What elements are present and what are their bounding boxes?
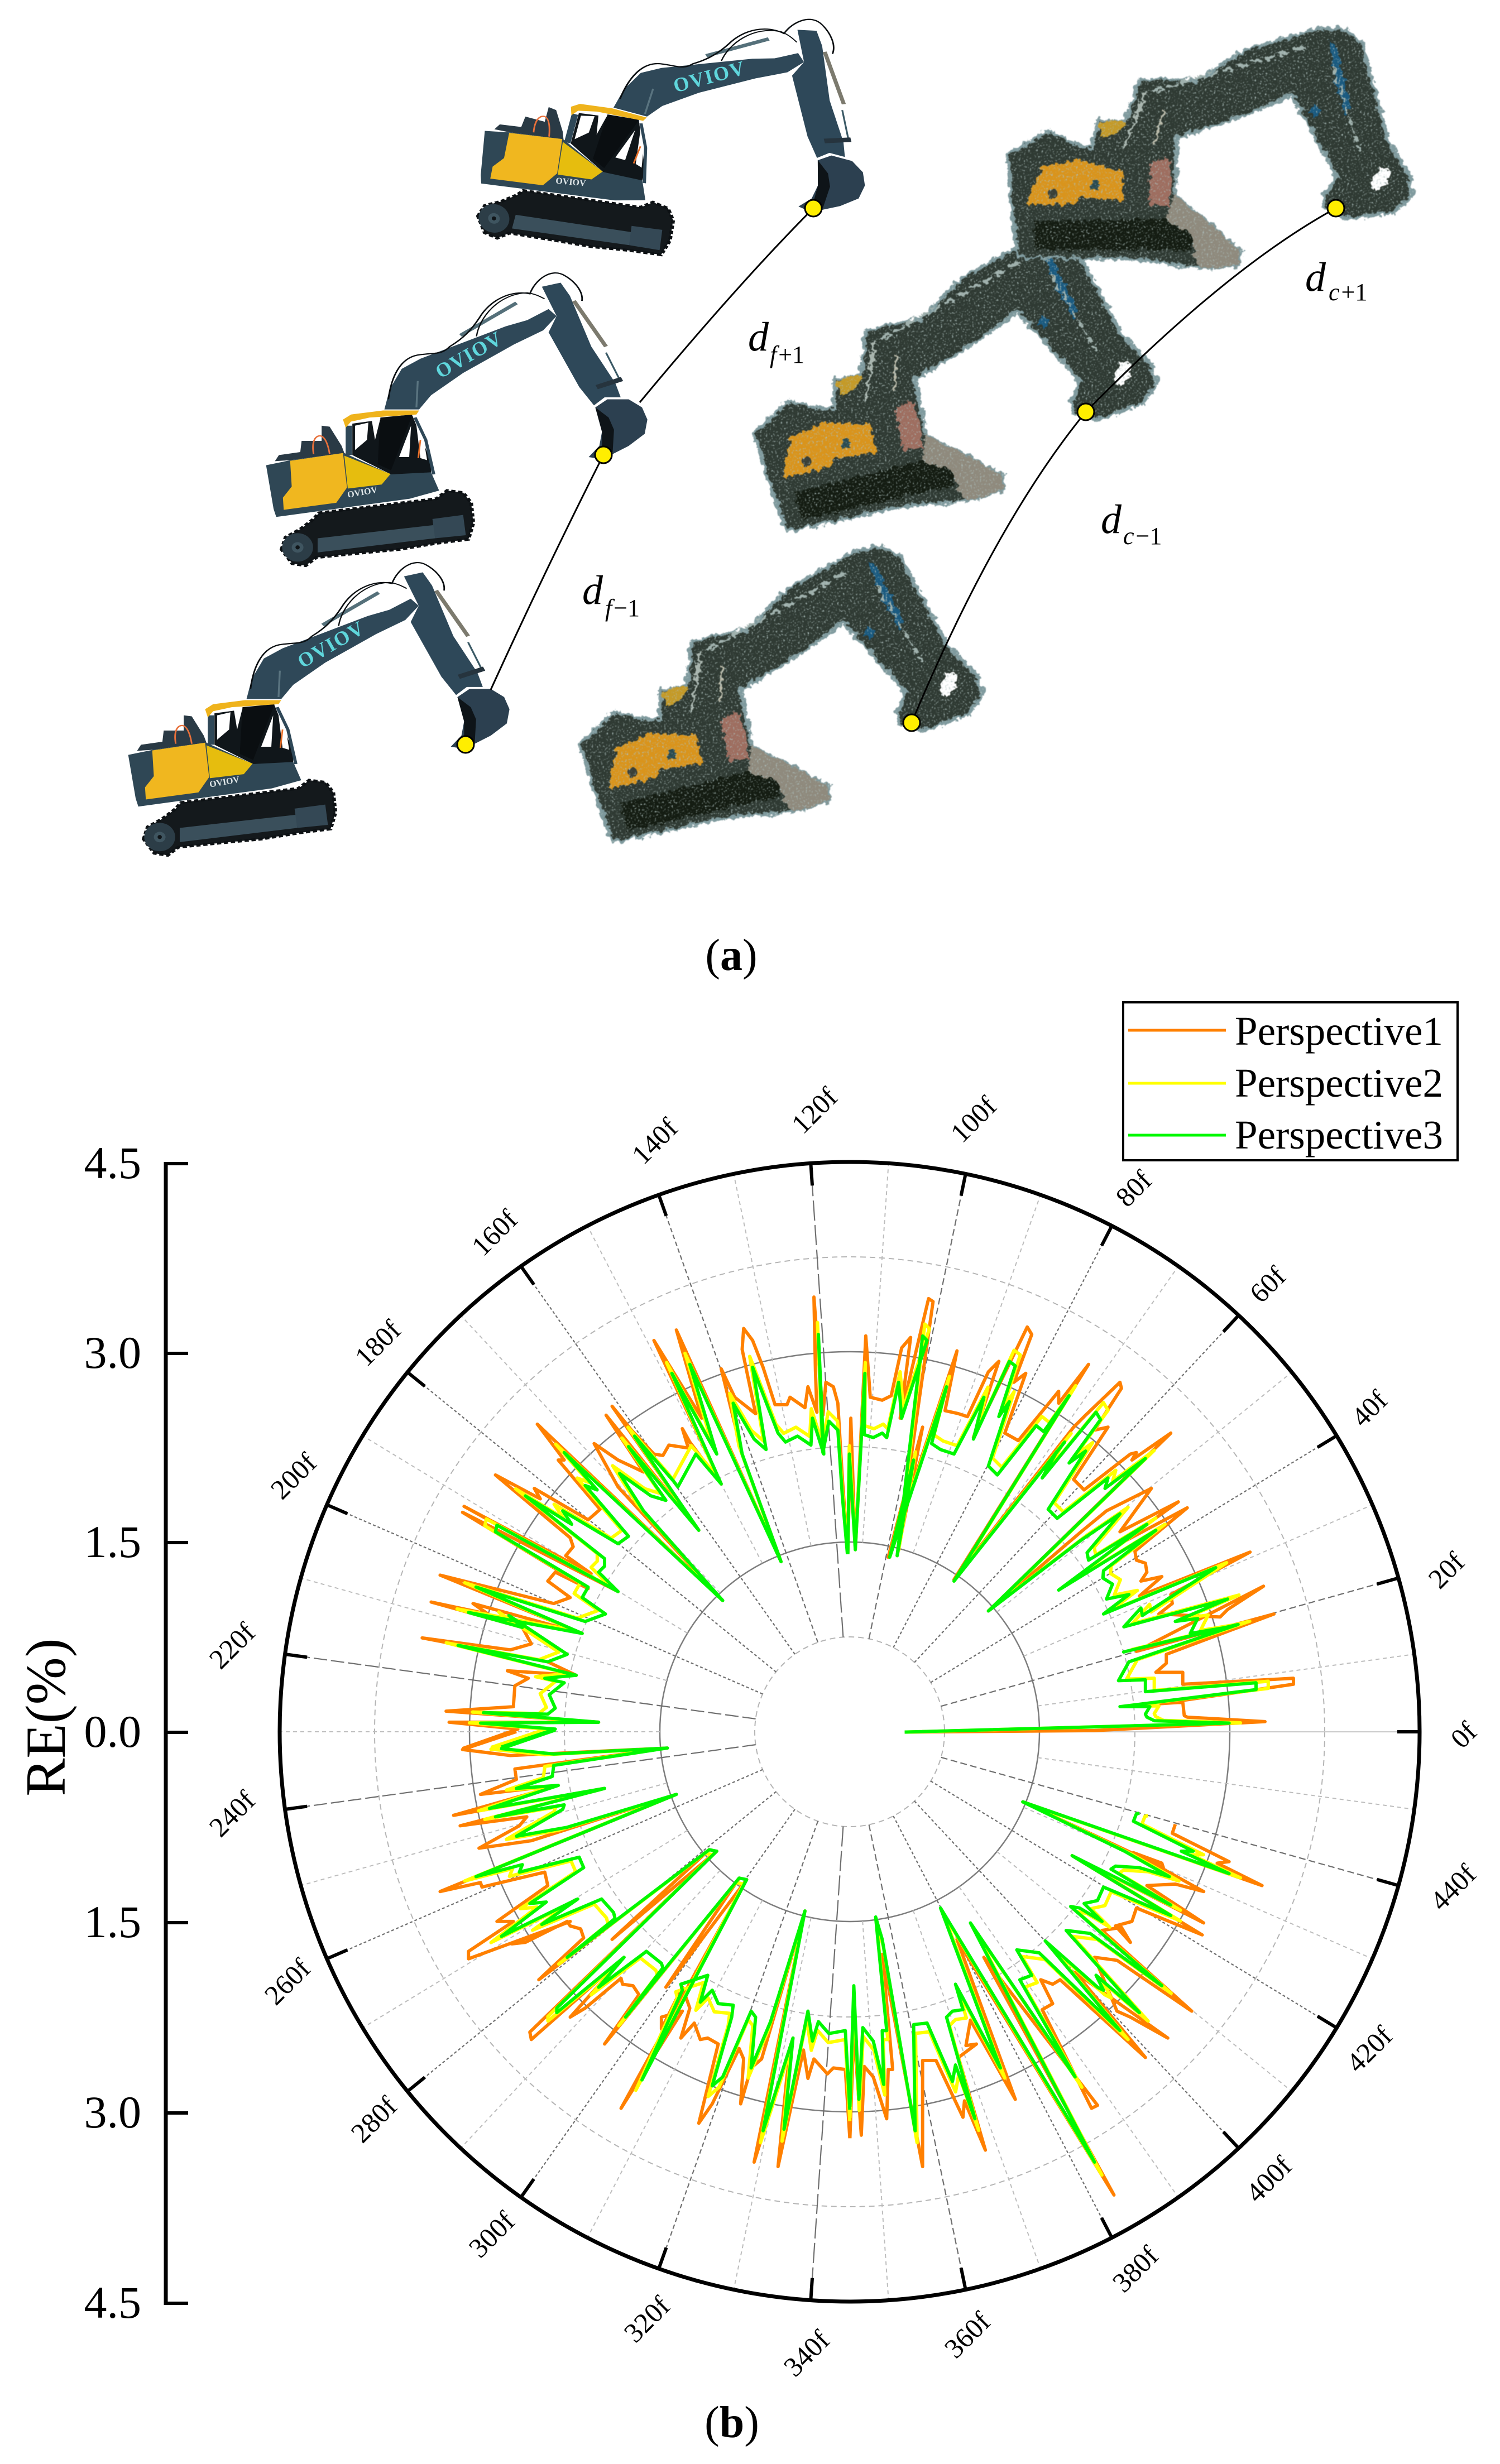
- label d c+1: d: [1305, 254, 1326, 300]
- excavator photo frame lower: [128, 563, 510, 856]
- polar chart outer circle: [280, 1162, 1420, 2302]
- caption a: (a): [705, 931, 758, 980]
- RE axis tick labels: [84, 1137, 141, 2328]
- RE axis line and ticks: [166, 1162, 188, 2305]
- polar frame labels: 320f: [617, 2290, 676, 2348]
- polar frame labels: 180f: [348, 1314, 407, 1372]
- label d f+1: +1: [778, 341, 804, 368]
- polar frame labels: [203, 1081, 1483, 2383]
- excavator photo frame middle: [266, 273, 648, 566]
- polar frame labels: 360f: [938, 2306, 996, 2364]
- polar tick marks: [285, 1163, 1420, 2300]
- label d c+1: c: [1329, 278, 1340, 306]
- RE axis tick labels: 1.5: [84, 1896, 141, 1947]
- polar frame labels: 380f: [1106, 2240, 1164, 2298]
- label d c+1: +1: [1341, 278, 1367, 306]
- polar frame labels: 200f: [264, 1447, 323, 1505]
- label d c-1: d: [1101, 497, 1122, 542]
- polar frame labels: 440f: [1424, 1858, 1482, 1917]
- label d f-1: −1: [614, 594, 640, 622]
- series: Perspective3 green: [458, 1334, 1256, 2162]
- RE axis title: RE(%): [15, 1638, 78, 1797]
- label d f-1: d: [582, 568, 603, 613]
- polar frame labels: 340f: [777, 2324, 836, 2383]
- polar frame labels: 100f: [944, 1090, 1003, 1149]
- polar frame labels: 420f: [1340, 2020, 1398, 2078]
- label d c-1: −1: [1136, 522, 1162, 550]
- legend: Perspective1: [1235, 1008, 1443, 1054]
- reconstructed excavator upper: [985, 0, 1445, 340]
- series: Perspective1 orange: [422, 1297, 1293, 2195]
- polar frame labels: 240f: [203, 1784, 261, 1843]
- RE axis tick labels: 1.5: [84, 1516, 141, 1567]
- polar frame labels: 260f: [258, 1952, 317, 2011]
- polar frame labels: 220f: [203, 1616, 261, 1675]
- label d f-1: f: [605, 594, 615, 622]
- series: Perspective2 yellow: [446, 1323, 1268, 2175]
- polar frame labels: 20f: [1422, 1546, 1470, 1594]
- legend: [1123, 1002, 1458, 1160]
- minor radial grid lines: [280, 1163, 1414, 2300]
- legend: Perspective2: [1235, 1060, 1443, 1106]
- RE axis tick labels: 0.0: [84, 1706, 141, 1757]
- polar frame labels: 40f: [1345, 1384, 1393, 1433]
- reconstructed excavator middle: [754, 236, 1157, 531]
- polar frame labels: 80f: [1109, 1164, 1158, 1213]
- label d f+1: d: [748, 314, 769, 360]
- polar frame labels: 120f: [785, 1081, 844, 1140]
- polar frame labels: 280f: [344, 2090, 403, 2149]
- polar frame labels: 0f: [1444, 1716, 1483, 1754]
- polar grid circles: [375, 1257, 1325, 2207]
- excavator photo frame upper: [459, 0, 903, 326]
- legend: Perspective3: [1235, 1112, 1443, 1157]
- polar frame labels: 60f: [1243, 1260, 1292, 1309]
- RE axis tick labels: 4.5: [84, 2277, 141, 2328]
- label d c-1: c: [1123, 522, 1134, 550]
- caption b: (b): [705, 2398, 759, 2447]
- polar frame labels: 160f: [465, 1203, 524, 1262]
- bucket tip markers: [457, 200, 1344, 753]
- RE axis tick labels: 3.0: [84, 2087, 141, 2138]
- major radial grid lines: [285, 1163, 1420, 2300]
- polar frame labels: 300f: [462, 2205, 521, 2264]
- trajectory curves: [491, 208, 1336, 723]
- polar frame labels: 400f: [1239, 2150, 1298, 2208]
- RE axis tick labels: 3.0: [84, 1327, 141, 1378]
- RE axis tick labels: 4.5: [84, 1137, 141, 1188]
- panel a: excavator frames: [128, 0, 1445, 856]
- label d f+1: f: [770, 341, 780, 368]
- polar frame labels: 140f: [625, 1112, 684, 1170]
- reconstructed excavator lower: [579, 546, 983, 842]
